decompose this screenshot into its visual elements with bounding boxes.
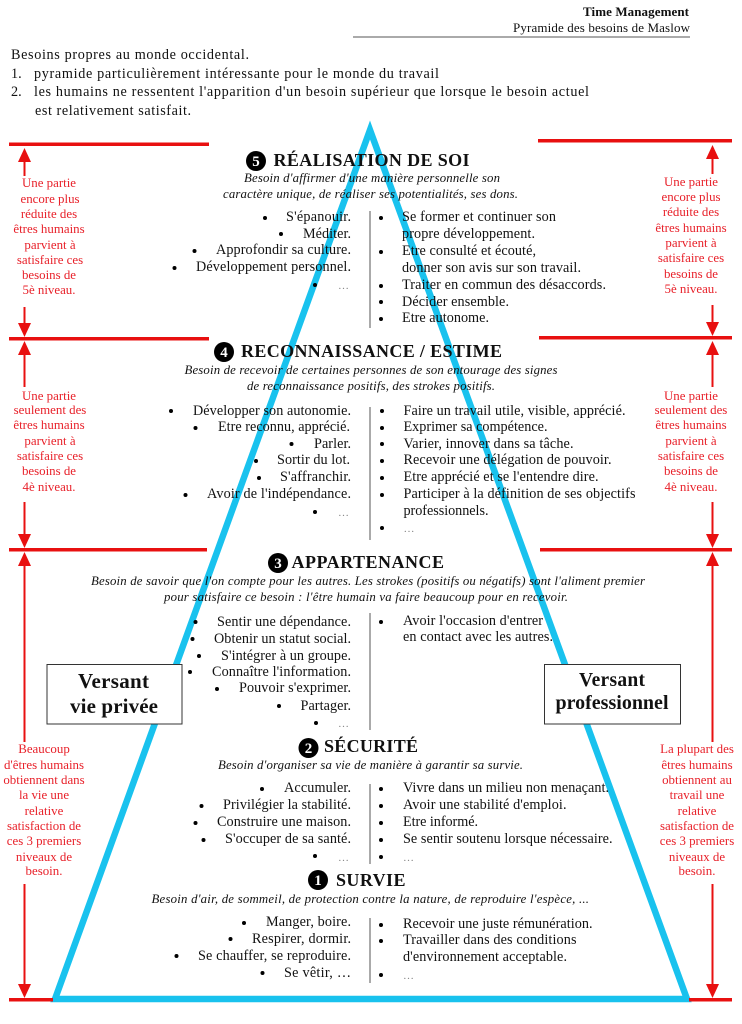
box: versant vie privee: vie privée <box>70 694 158 718</box>
right note level 5: encore plus <box>661 190 721 204</box>
right note level 5: parvient à <box>665 236 717 250</box>
level 1 panel <box>152 870 592 983</box>
left note levels 1 to 3 <box>3 742 85 878</box>
level 5 panel <box>172 149 606 328</box>
left note level 5: réduite des <box>21 207 77 221</box>
right note level 5 <box>655 175 727 296</box>
level 1 professional list: d'environnement acceptable. <box>403 949 567 965</box>
level 3 private list: Sentir une dépendance. <box>217 614 351 630</box>
level 4 heading: RECONNAISSANCE / ESTIME <box>241 341 502 361</box>
level 3 private list <box>188 614 351 730</box>
level 2 professional list: Se sentir soutenu lorsque nécessaire. <box>403 831 612 847</box>
right note level 4: seulement des <box>655 403 727 417</box>
intro text: les humains ne ressentent l'apparition d'un besoin supérieur que lorsque le besoin actuel <box>34 84 589 100</box>
level 3 private list: Obtenir un statut social. <box>214 631 351 647</box>
left note levels 1 to 3: satisfaction de <box>7 819 81 833</box>
right note level 5: 5è niveau. <box>665 282 717 296</box>
level 1 private list: Manger, boire. <box>266 914 351 930</box>
level 2 private list: … <box>338 852 349 864</box>
right note levels 1 to 3: obtiennent au <box>662 773 732 787</box>
level 2 private list: Privilégier la stabilité. <box>223 797 351 813</box>
level 4 professional list: professionnels. <box>404 503 488 519</box>
right note levels 1 to 3: besoin. <box>679 864 715 878</box>
header: Pyramide des besoins de Maslow <box>513 20 691 35</box>
level 2 professional list <box>379 780 612 864</box>
level 4 professional list <box>380 403 636 535</box>
left note level 5 <box>13 176 85 297</box>
level 3 divider <box>369 613 371 730</box>
header: Time Management <box>583 4 690 19</box>
left note level 4: 4è niveau. <box>23 480 75 494</box>
right note levels 1 to 3: La plupart des <box>660 742 734 756</box>
level 1 professional list: … <box>403 970 414 982</box>
level 3 private list: Connaître l'information. <box>212 664 351 680</box>
right note level 4: êtres humains <box>655 418 727 432</box>
level 5 heading: 5 <box>252 154 260 170</box>
level 4 private list: Avoir de l'indépendance. <box>207 486 351 502</box>
level 5 professional list: Se former et continuer son <box>402 209 556 225</box>
level 3 private list: Partager. <box>300 698 351 714</box>
level 4 description: de reconnaissance positifs, des strokes positifs. <box>247 379 495 393</box>
level 2 divider <box>369 784 371 864</box>
left note levels 1 to 3: Beaucoup <box>18 742 70 756</box>
level 1 heading: 1 <box>314 873 322 889</box>
level 3 private list: S'intégrer à un groupe. <box>221 648 351 664</box>
box: versant professionnel: professionnel <box>556 692 669 714</box>
box: versant vie privee <box>47 664 182 724</box>
right note levels 1 to 3 <box>660 742 734 878</box>
level 5 private list: Méditer. <box>303 226 351 242</box>
level 1 professional list: Travailler dans des conditions <box>403 932 577 948</box>
level 5 professional list <box>379 209 606 326</box>
level 4 private list: … <box>338 507 349 519</box>
intro text: 1. <box>11 66 22 82</box>
level 2 panel <box>194 735 612 864</box>
left red arrows <box>18 148 31 998</box>
level 3 heading: 3 <box>274 556 282 572</box>
level 3 professional list: en contact avec les autres. <box>403 629 553 645</box>
level 1 private list: Se chauffer, se reproduire. <box>198 948 351 964</box>
right note level 5: satisfaire ces <box>658 251 724 265</box>
level 4 professional list: Varier, innover dans sa tâche. <box>404 436 574 452</box>
right note level 4: Une partie <box>664 389 718 403</box>
right note level 4: 4è niveau. <box>665 480 717 494</box>
intro text: Besoins propres au monde occidental. <box>11 47 249 63</box>
level 3 description <box>91 574 646 604</box>
left note level 5: parvient à <box>24 238 76 252</box>
left note level 4: satisfaire ces <box>17 449 83 463</box>
left note levels 1 to 3: ces 3 premiers <box>7 834 81 848</box>
level 4 description <box>184 363 558 393</box>
intro text: 2. <box>11 84 22 100</box>
left note level 4: seulement des <box>14 403 86 417</box>
left note levels 1 to 3: la vie une <box>19 788 69 802</box>
level 5 professional list: Décider ensemble. <box>402 294 509 310</box>
box: versant professionnel: Versant <box>579 670 646 691</box>
level 4 description: Besoin de recevoir de certaines personnes de son entourage des signes <box>184 363 558 377</box>
level 4 private list: Etre reconnu, apprécié. <box>218 419 350 435</box>
level 1 professional list <box>379 916 592 982</box>
level 4 private list: Développer son autonomie. <box>193 403 351 419</box>
left note level 4: parvient à <box>24 434 76 448</box>
level 2 private list: Accumuler. <box>284 780 351 796</box>
level 4 private list: Sortir du lot. <box>277 452 350 468</box>
level 5 private list: S'épanouir. <box>286 209 351 225</box>
level 4 professional list: Faire un travail utile, visible, apprécié. <box>404 403 626 419</box>
left note levels 1 to 3: besoin. <box>26 864 62 878</box>
level 2 professional list: Etre informé. <box>403 814 478 830</box>
left note level 5: 5è niveau. <box>23 283 75 297</box>
left note level 4 <box>13 389 86 494</box>
level 1 heading: SURVIE <box>336 870 406 890</box>
level 5 professional list: Traiter en commun des désaccords. <box>402 277 606 293</box>
level 4 private list: Parler. <box>314 436 351 452</box>
right note level 4: besoins de <box>664 464 718 478</box>
level 5 heading: RÉALISATION DE SOI <box>274 149 470 170</box>
right note levels 1 to 3: ces 3 premiers <box>660 834 734 848</box>
level 2 private list: Construire une maison. <box>217 814 351 830</box>
level 1 private list: Respirer, dormir. <box>252 931 351 947</box>
right red arrows <box>706 145 719 998</box>
intro text: pyramide particulièrement intéressante pour le monde du travail <box>34 66 439 82</box>
level 3 professional list <box>379 613 553 645</box>
level 5 description <box>223 171 518 201</box>
pyramid triangle <box>55 130 687 999</box>
level 3 private list: … <box>338 718 349 730</box>
level 2 private list <box>194 780 351 864</box>
right note levels 1 to 3: satisfaction de <box>660 819 734 833</box>
level 3 panel <box>91 552 646 730</box>
right note level 4: parvient à <box>665 434 717 448</box>
left note levels 1 to 3: relative <box>25 804 64 818</box>
level 5 professional list: Etre consulté et écouté, <box>402 243 536 259</box>
level 2 professional list: Vivre dans un milieu non menaçant. <box>403 780 609 796</box>
level 1 private list <box>174 914 351 981</box>
level 4 professional list: Exprimer sa compétence. <box>404 419 548 435</box>
level 4 panel <box>169 341 636 540</box>
level 3 description: Besoin de savoir que l'on compte pour les autres. Les strokes (positifs ou négatifs) sont l'aliment premier <box>91 574 646 588</box>
left note level 4: Une partie <box>22 389 76 403</box>
level 2 professional list: … <box>403 852 414 864</box>
left note level 5: besoins de <box>22 268 76 282</box>
level 5 professional list: donner son avis sur son travail. <box>402 260 581 276</box>
level 3 heading: APPARTENANCE <box>292 552 444 572</box>
level 2 heading: SÉCURITÉ <box>324 735 418 756</box>
level 1 description: Besoin d'air, de sommeil, de protection contre la nature, de reproduire l'espèce, ... <box>152 892 589 906</box>
left note level 4: besoins de <box>22 464 76 478</box>
right note levels 1 to 3: êtres humains <box>661 758 733 772</box>
level 3 professional list: Avoir l'occasion d'entrer <box>403 613 543 629</box>
left note level 5: satisfaire ces <box>17 253 83 267</box>
header <box>353 4 691 37</box>
level 5 private list <box>172 209 351 292</box>
level 4 private list: S'affranchir. <box>280 469 351 485</box>
level 2 private list: S'occuper de sa santé. <box>225 831 351 847</box>
level 3 description: pour satisfaire ce besoin : l'être humain va faire beaucoup pour en recevoir. <box>163 590 568 604</box>
level 4 professional list: Participer à la définition de ses objectifs <box>404 486 636 502</box>
level 5 private list: Approfondir sa culture. <box>216 242 351 258</box>
right note level 5: réduite des <box>663 205 719 219</box>
right note level 5: besoins de <box>664 267 718 281</box>
left note level 5: Une partie <box>22 176 76 190</box>
intro text: est relativement satisfait. <box>35 103 191 119</box>
level 4 professional list: … <box>404 523 414 535</box>
left note level 5: êtres humains <box>13 222 85 236</box>
left note levels 1 to 3: d'êtres humains <box>4 758 84 772</box>
level 5 private list: … <box>338 280 349 292</box>
level 1 professional list: Recevoir une juste rémunération. <box>403 916 592 932</box>
level 5 private list: Développement personnel. <box>196 259 351 275</box>
level 5 divider <box>369 211 371 328</box>
intro text <box>11 47 589 119</box>
right note levels 1 to 3: travail une <box>670 788 725 802</box>
level 5 professional list: Etre autonome. <box>402 310 489 326</box>
level 4 heading: 4 <box>220 345 228 361</box>
left note level 4: êtres humains <box>13 418 85 432</box>
right note level 5: êtres humains <box>655 221 727 235</box>
box: versant vie privee: Versant <box>78 669 149 693</box>
level 2 heading <box>298 735 418 758</box>
level 5 description: caractère unique, de réaliser ses potentialités, ses dons. <box>223 187 518 201</box>
right note levels 1 to 3: niveaux de <box>669 850 725 864</box>
level 1 private list: Se vêtir, … <box>284 965 351 981</box>
left note level 5: encore plus <box>20 192 80 206</box>
level 4 private list <box>169 403 351 519</box>
level 2 professional list: Avoir une stabilité d'emploi. <box>403 797 566 813</box>
box: versant professionnel <box>544 664 680 724</box>
right note level 4 <box>655 389 727 494</box>
level 4 divider <box>369 407 371 540</box>
right note level 5: Une partie <box>664 175 718 189</box>
left note levels 1 to 3: niveaux de <box>16 850 72 864</box>
level 1 divider <box>369 918 371 983</box>
level 2 heading: 2 <box>305 741 312 757</box>
right note level 4: satisfaire ces <box>658 449 724 463</box>
level 3 private list: Pouvoir s'exprimer. <box>239 680 351 696</box>
left note levels 1 to 3: obtiennent dans <box>3 773 85 787</box>
level 5 professional list: propre développement. <box>402 226 535 242</box>
level 5 description: Besoin d'affirmer d'une manière personnelle son <box>244 171 500 185</box>
level 4 professional list: Recevoir une délégation de pouvoir. <box>404 452 612 468</box>
level 4 professional list: Etre apprécié et se l'entendre dire. <box>404 469 598 485</box>
right note levels 1 to 3: relative <box>678 804 717 818</box>
level 2 description: Besoin d'organiser sa vie de manière à garantir sa survie. <box>218 758 523 772</box>
